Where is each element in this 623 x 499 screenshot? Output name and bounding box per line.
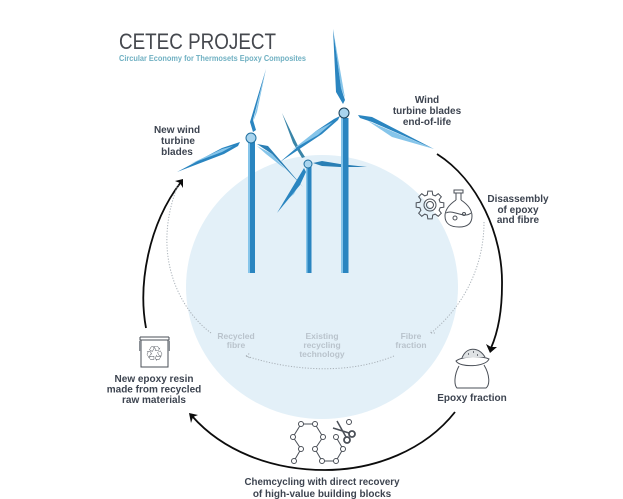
- detached blade: [358, 115, 434, 149]
- background circle: [186, 155, 458, 419]
- label: new wind turbine blades: [154, 125, 200, 158]
- label: end-of-life: [393, 95, 462, 128]
- label: new epoxy resin: raw materials: [122, 395, 186, 406]
- icon: molecule chain with scissors: [290, 420, 355, 464]
- grey labels: Existing: [305, 331, 339, 341]
- label: disassembly: and fibre: [497, 215, 540, 226]
- dotted recycling loop: [167, 185, 484, 369]
- icon: gear: [416, 191, 444, 219]
- grey labels: fraction: [395, 340, 427, 350]
- title: CETEC PROJECT: [119, 29, 276, 54]
- label: end-of-life: end-of-life: [403, 117, 452, 128]
- turbine: middle: [277, 113, 367, 273]
- arrow: epoxy to resin: [189, 412, 455, 470]
- label: end-of-life: Wind: [415, 95, 439, 106]
- turbine: right: [280, 29, 349, 273]
- icon: flask: [445, 190, 472, 227]
- label: chemcycling: [244, 477, 400, 499]
- icon: sack: [455, 349, 489, 388]
- icon: recycling bucket: ♲: [145, 342, 164, 366]
- label: new wind turbine blades: turbine: [161, 136, 195, 147]
- grey labels: Recycled: [217, 331, 255, 341]
- grey labels: Fibre: [401, 331, 422, 341]
- label: chemcycling: Chemcycling with direct recovery: [244, 477, 400, 488]
- label: new epoxy resin: made from recycled: [107, 384, 201, 396]
- label: new epoxy resin: New epoxy resin: [115, 374, 193, 385]
- grey labels: recycling: [303, 340, 341, 350]
- turbine: left: [177, 69, 303, 273]
- arrow: resin to new blades: [143, 179, 183, 328]
- grey labels: [217, 331, 427, 359]
- subtitle: Circular Economy for Thermosets Epoxy Composites: [119, 53, 306, 63]
- icon: recycling bucket: [140, 337, 169, 367]
- label: disassembly: [487, 194, 549, 226]
- grey labels: technology: [299, 349, 345, 359]
- label: end-of-life: turbine blades: [393, 106, 462, 117]
- label: new epoxy resin: [107, 374, 201, 406]
- label: disassembly: Disassembly: [487, 194, 549, 205]
- label: new wind turbine blades: New wind: [154, 125, 200, 136]
- arrow: disassembly to epoxy: [437, 154, 502, 353]
- label: disassembly: of epoxy: [497, 205, 539, 216]
- label: new wind turbine blades: blades: [161, 147, 193, 158]
- label: epoxy fraction: Epoxy fraction: [437, 393, 507, 404]
- grey labels: fibre: [227, 340, 245, 350]
